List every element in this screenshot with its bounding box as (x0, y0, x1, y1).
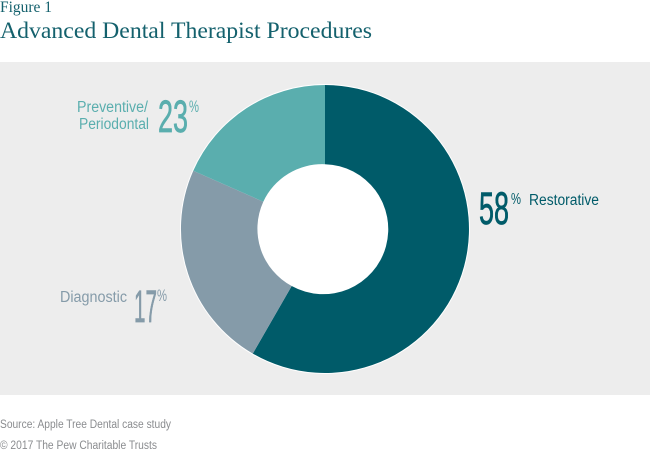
label: preventive/periodontal: % (189, 97, 199, 116)
donut outer halo (180, 84, 470, 374)
label: restorative (479, 183, 599, 234)
slice: restorative (253, 85, 469, 373)
slice: preventive/periodontal (193, 85, 325, 202)
label: diagnostic: % (157, 286, 167, 305)
source note: Source: Apple Tree Dental case study (0, 419, 171, 431)
label: preventive/periodontal: Periodontal (79, 116, 149, 133)
label: diagnostic: Diagnostic (60, 289, 127, 306)
label: restorative: Restorative (529, 192, 599, 209)
label: preventive/periodontal: 23 (158, 91, 188, 142)
label: diagnostic (60, 281, 167, 332)
title: Advanced Dental Therapist Procedures (0, 18, 372, 43)
label: restorative: 58 (479, 183, 509, 234)
panel: chart background (0, 62, 650, 395)
donut chart (180, 84, 470, 374)
label: restorative: % (511, 191, 521, 208)
label: preventive/periodontal (77, 91, 199, 142)
label: preventive/periodontal: Preventive/ (77, 99, 149, 116)
slice: diagnostic (181, 171, 292, 354)
label: diagnostic: 17 (134, 281, 157, 332)
